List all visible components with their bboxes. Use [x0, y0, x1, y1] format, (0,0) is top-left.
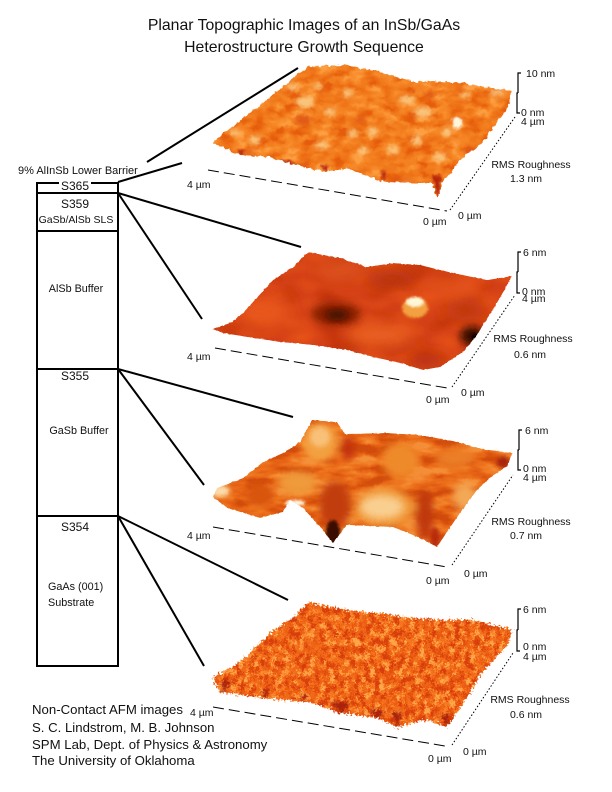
axes S359 — [215, 252, 521, 388]
z scale S355 — [523, 425, 549, 484]
panel: layer stack column: S365 — [61, 179, 89, 193]
panel: layer stack column — [37, 179, 118, 666]
roughness S355: RMS Roughness — [491, 516, 571, 528]
panel: layer stack column: GaSb/AlSb SLS — [39, 214, 113, 226]
roughness S365: RMS Roughness — [491, 159, 571, 171]
roughness S365 — [491, 159, 571, 185]
z scale S365 — [521, 68, 555, 128]
z scale S359: 4 µm — [522, 293, 546, 305]
roughness S359: RMS Roughness — [493, 333, 573, 345]
axis labels S359 — [187, 351, 485, 406]
credits text block — [32, 702, 268, 768]
surface S355 — [210, 420, 512, 549]
z scale S354 — [523, 604, 547, 663]
z scale S359: 6 nm — [523, 247, 547, 259]
axis labels S359: 4 µm — [187, 351, 211, 363]
panel: layer stack column: GaAs (001) — [48, 581, 103, 593]
z scale S354: 6 nm — [523, 604, 547, 616]
panel: layer stack column: S355 — [61, 369, 89, 383]
surface S365 — [212, 65, 512, 198]
axis labels S365 — [187, 179, 482, 228]
roughness S354: 0.6 nm — [510, 709, 542, 721]
panel: layer stack column: S359 — [61, 197, 89, 211]
z scale S355: 0 nm — [523, 463, 547, 475]
panel: layer stack column: S354 — [61, 520, 89, 534]
panel: layer stack column: AlSb Buffer — [49, 283, 104, 295]
roughness S359: 0.6 nm — [514, 349, 546, 361]
axis labels S355: 0 µm — [464, 568, 488, 580]
axis labels S365: 0 µm — [423, 216, 447, 228]
title: Heterostructure Growth Sequence — [184, 39, 424, 56]
z scale S355: 6 nm — [525, 425, 549, 437]
panel: S359 surface — [187, 247, 573, 406]
roughness S354: RMS Roughness — [490, 694, 570, 706]
panel: S355 surface — [187, 420, 571, 587]
z scale S365: 10 nm — [526, 68, 555, 80]
z scale S365: 4 µm — [521, 116, 545, 128]
lower barrier label: 9% AlInSb Lower Barrier — [18, 165, 138, 177]
surface S354 — [212, 602, 512, 728]
axis labels S354: 4 µm — [190, 707, 214, 719]
axis labels S354: 0 µm — [463, 746, 487, 758]
roughness S354 — [490, 694, 570, 721]
axes S365 — [208, 73, 521, 211]
panel: layer stack column: GaSb Buffer — [49, 425, 109, 437]
connector lines — [118, 68, 301, 666]
z scale S354: 4 µm — [523, 651, 547, 663]
z scale S359: 0 nm — [522, 286, 546, 298]
panel: S354 surface — [190, 602, 570, 765]
title: Planar Topographic Images of an InSb/GaAs — [148, 17, 460, 34]
axis labels S365: 0 µm — [458, 210, 482, 222]
z scale S354: 0 nm — [523, 641, 547, 653]
depth spikes — [222, 680, 450, 728]
axes S355 — [213, 430, 522, 567]
depth spikes — [237, 150, 442, 198]
axis labels S355 — [187, 530, 488, 587]
title — [148, 17, 460, 56]
z scale S355: 4 µm — [523, 472, 547, 484]
z scale S365: 0 nm — [521, 107, 545, 119]
roughness S355: 0.7 nm — [510, 530, 542, 542]
axis labels S355: 0 µm — [426, 575, 450, 587]
credits text block: Non-Contact AFM images — [32, 702, 183, 717]
axis labels S354 — [190, 707, 487, 765]
surface S359 — [212, 252, 512, 370]
roughness S359 — [493, 333, 573, 361]
credits text block: SPM Lab, Dept. of Physics & Astronomy — [32, 737, 268, 752]
axis labels S354: 0 µm — [428, 753, 452, 765]
axis labels S359: 0 µm — [426, 394, 450, 406]
axes S354 — [213, 609, 521, 746]
axis labels S359: 0 µm — [461, 387, 485, 399]
z scale S359 — [522, 247, 547, 305]
axis labels S355: 4 µm — [187, 530, 211, 542]
credits text block: S. C. Lindstrom, M. B. Johnson — [32, 720, 215, 735]
roughness S355 — [491, 516, 571, 542]
roughness S365: 1.3 nm — [510, 173, 542, 185]
credits text block: The University of Oklahoma — [32, 753, 195, 768]
panel: layer stack column: Substrate — [48, 597, 94, 609]
axis labels S365: 4 µm — [187, 179, 211, 191]
panel: S365 surface — [187, 65, 571, 228]
